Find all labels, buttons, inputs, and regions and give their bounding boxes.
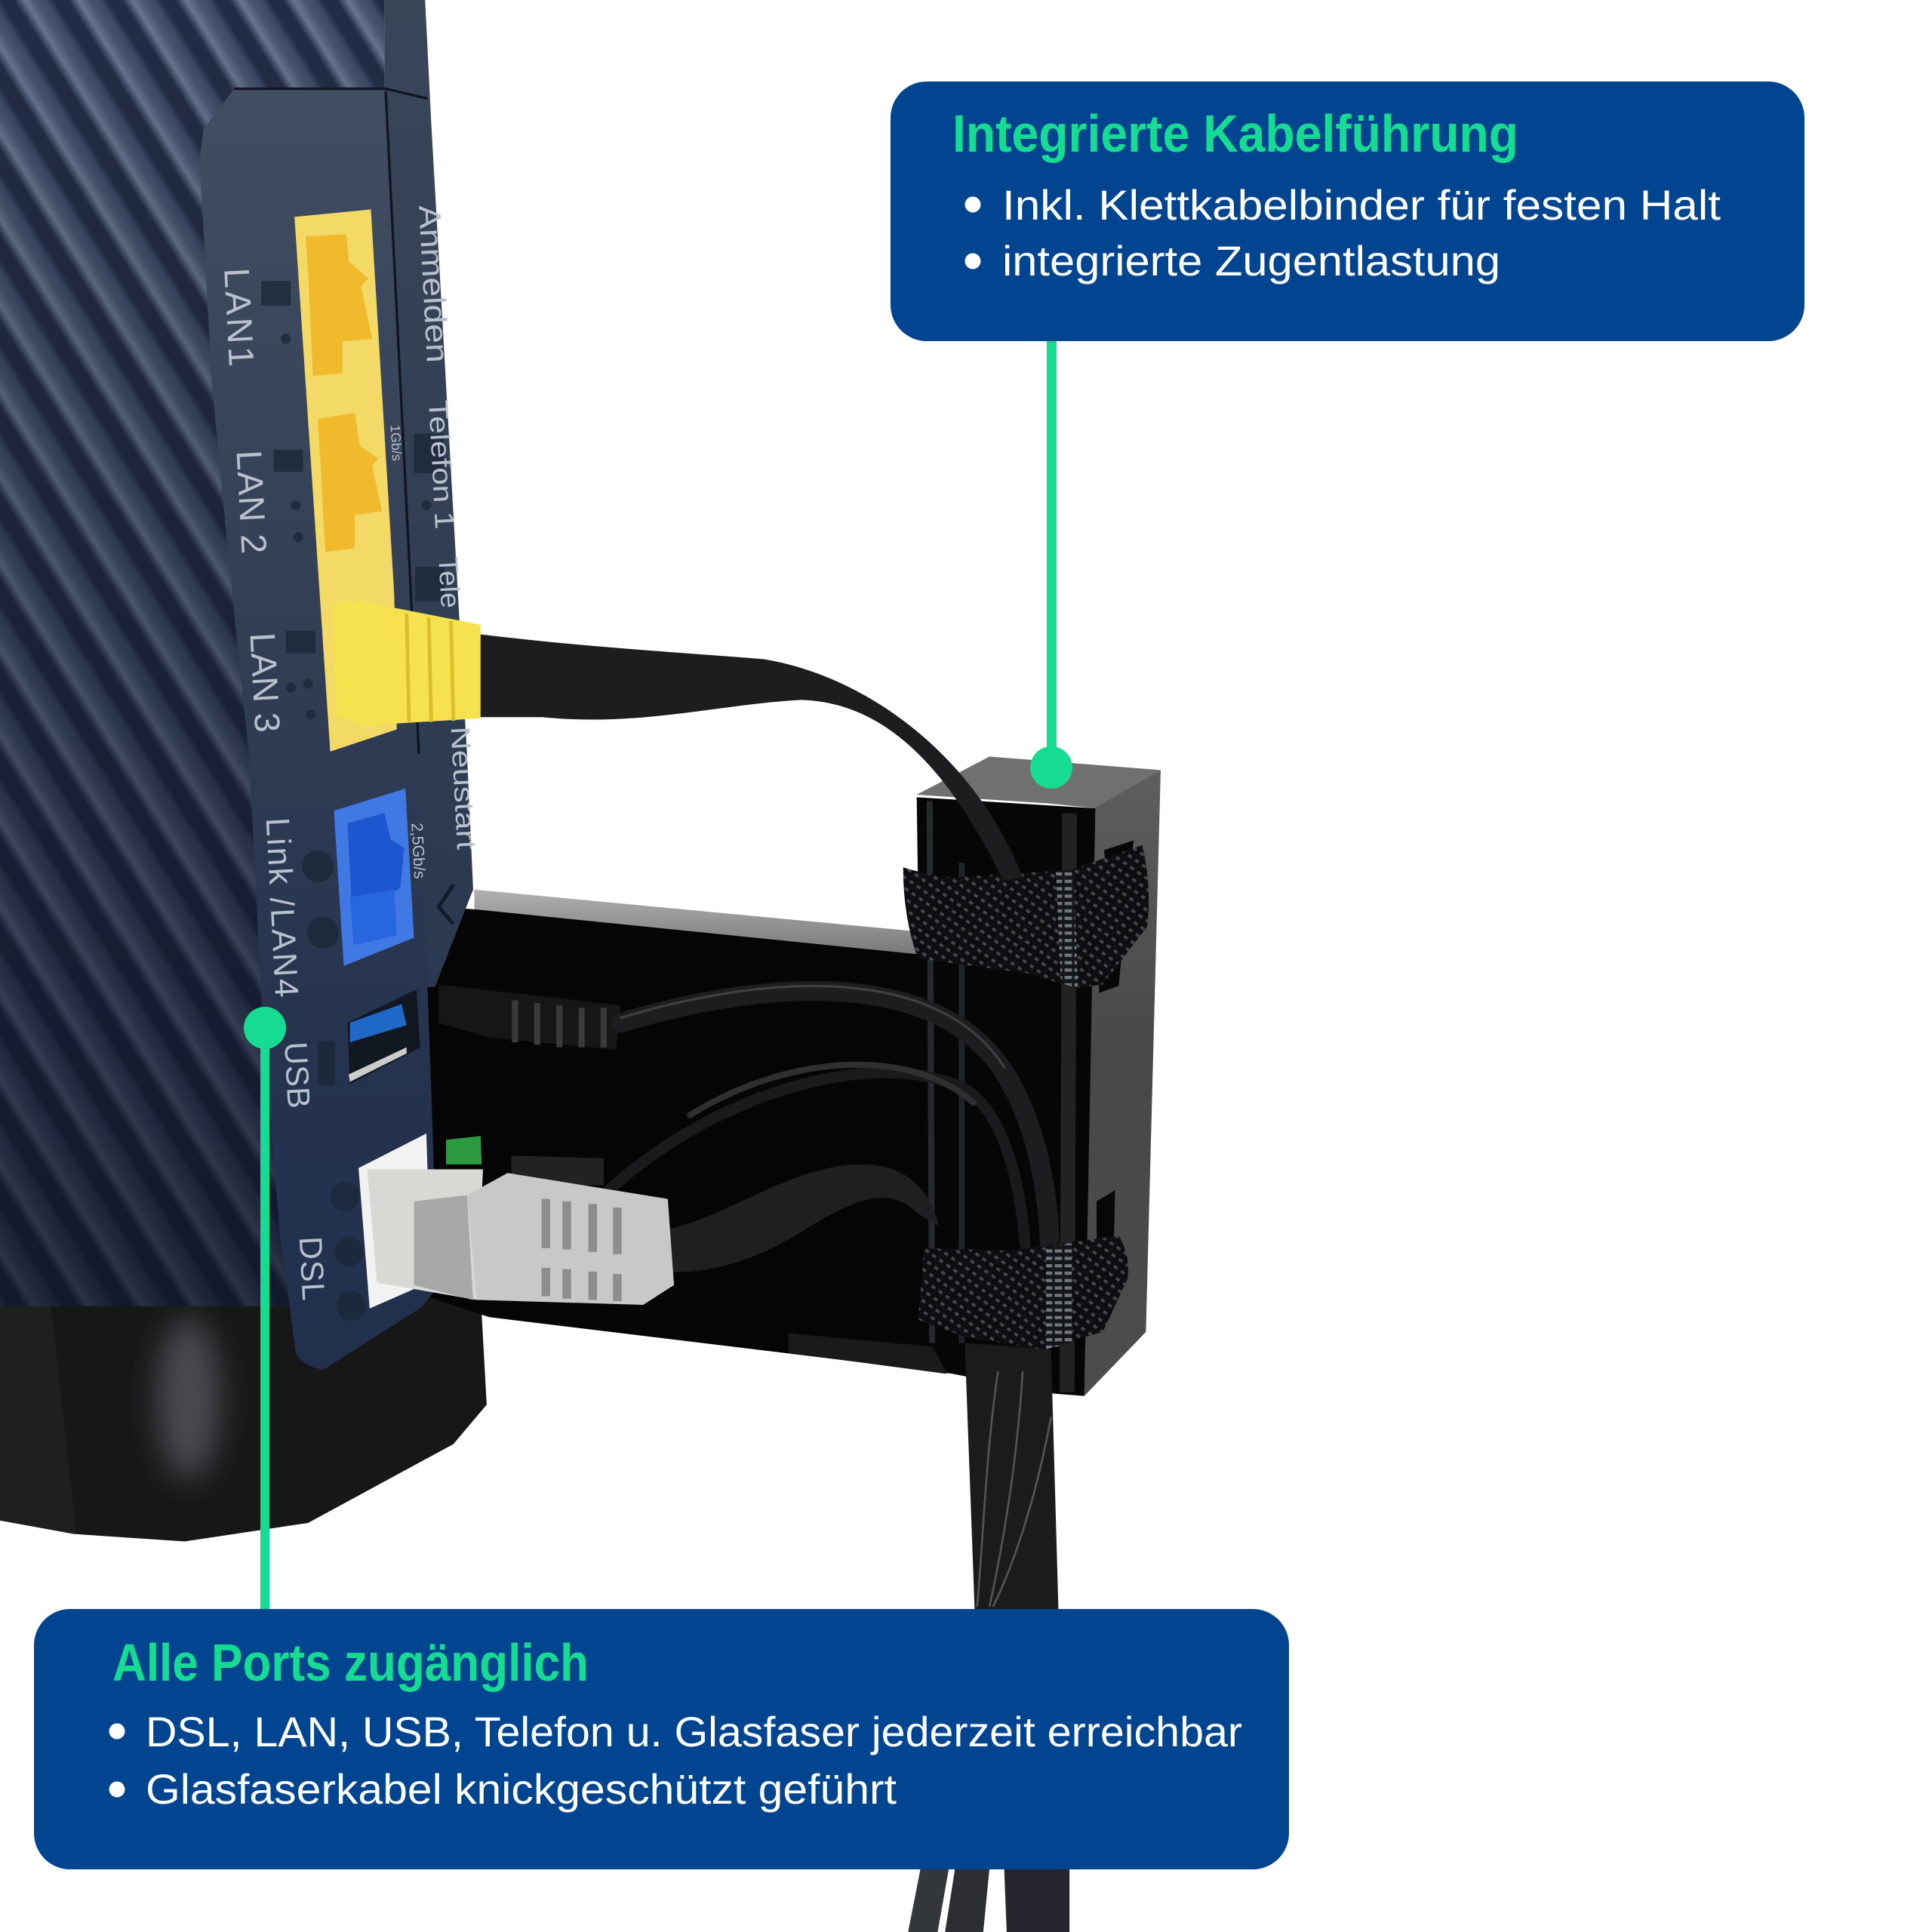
panel label 1 Gb/s: 1Gb/s: [388, 424, 405, 461]
panel buttons and LEDs: [261, 281, 445, 1321]
stand glare: [156, 1317, 220, 1480]
connector line: Ports: [244, 1007, 286, 1610]
bullet: [964, 254, 981, 269]
shell shading: [0, 0, 384, 1306]
stand left segment: [0, 1300, 76, 1534]
LAN 1 port: [306, 234, 372, 376]
guided black cables: [610, 986, 1050, 1244]
yellow plug: [331, 601, 481, 726]
green connector: [446, 1136, 481, 1164]
bracket top edge: [475, 890, 918, 956]
bullet: [109, 1781, 125, 1798]
USB port: [347, 989, 420, 1084]
panel label Telefon 2: Tele: [432, 555, 466, 609]
bullet: [964, 196, 981, 213]
plug clip: [414, 1195, 473, 1300]
panel label LAN1: LAN1: [216, 267, 261, 368]
bullet text: Inkl. Klettkabelbinder für festen Halt: [1002, 181, 1721, 229]
bracket plate lower edge: [789, 1334, 946, 1374]
LAN 2 port: [318, 413, 382, 552]
bullet text: DSL, LAN, USB, Telefon u. Glasfaser jederzeit erreichbar: [146, 1708, 1242, 1755]
callout: Integrierte Kabelführung: [891, 82, 1804, 341]
plug boot: [467, 1173, 674, 1305]
power plug on bracket: [438, 984, 621, 1050]
bracket black plate: [419, 906, 949, 1374]
panel label Telefon 1: Telefon 1: [423, 399, 460, 530]
bracket vertical box: [917, 756, 1161, 1396]
chevron mark: [438, 884, 454, 924]
panel seam line: [234, 89, 428, 754]
heading: Integrierte Kabelführung: [952, 104, 1518, 163]
box right face: [1084, 770, 1161, 1396]
connector line: Kabelführung: [1030, 341, 1072, 789]
panel label Neustart: Neustart: [445, 726, 482, 851]
cables below callout: [908, 1869, 1069, 1932]
DSL port: [358, 1134, 431, 1309]
clear plug head: [368, 1169, 483, 1300]
box front face: [917, 797, 1095, 1396]
panel label Anmelden: Anmelden: [412, 205, 455, 364]
panel label LAN 2: LAN 2: [228, 449, 274, 555]
yellow LAN port frame: [294, 210, 397, 752]
callout: Alle Ports zugänglich: [34, 1609, 1289, 1869]
panel label Link/LAN4: Link /LAN4: [259, 817, 305, 998]
grey DSL plug: [368, 1169, 674, 1305]
router stand: [0, 1294, 487, 1541]
velcro strap bottom: [918, 1236, 1128, 1349]
grey cable: [656, 1164, 939, 1272]
boot slots: [546, 1199, 617, 1301]
black plug: [512, 1155, 604, 1186]
bullet: [109, 1724, 125, 1739]
panel label LAN 3: LAN 3: [242, 632, 287, 734]
router striped shell: [0, 0, 384, 1306]
panel label 2.5 Gb/s: 2,5Gb/s: [408, 823, 428, 879]
box slots: [1097, 840, 1134, 1251]
photo: router and cable bracket: [0, 0, 1161, 1932]
panel label DSL: DSL: [293, 1235, 331, 1301]
router port panel: [199, 89, 438, 1371]
box top face: [917, 756, 1161, 808]
bullet text: Glasfaserkabel knickgeschützt geführt: [146, 1765, 897, 1813]
bullet text: integrierte Zugentlastung: [1002, 237, 1500, 285]
panel label USB: USB: [278, 1041, 317, 1109]
flat black LAN cable: [472, 633, 1023, 880]
heading: Alle Ports zugänglich: [112, 1633, 589, 1692]
velcro strap top: [903, 845, 1149, 988]
router right side strip: [384, 0, 473, 987]
cable bundle below bracket: [964, 1343, 1058, 1609]
blue port: [334, 789, 414, 966]
